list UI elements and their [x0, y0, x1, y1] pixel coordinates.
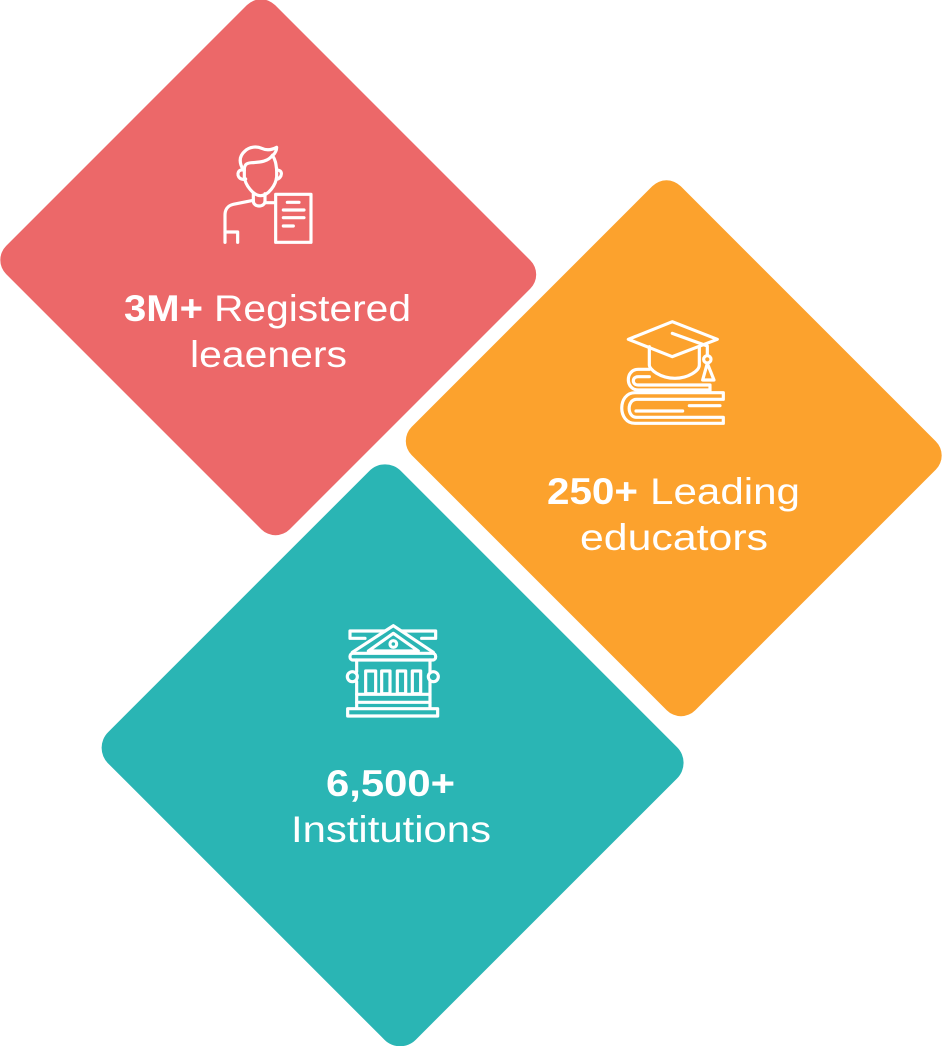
icon: learner with document — [225, 147, 311, 242]
text: 6,500+ Institutions: Institutions — [291, 809, 491, 850]
text: 6,500+ Institutions: 6,500+ — [326, 763, 455, 804]
panel: leading educators — [398, 172, 942, 724]
text: 3M+ Registered learners — [124, 288, 411, 375]
text: 250+ Leading educators: 250+ — [547, 471, 638, 512]
text: 3M+ Registered learners: leaeners — [190, 334, 347, 375]
text: 6,500+ Institutions — [291, 763, 491, 850]
icon: institution building — [347, 626, 438, 716]
icon: graduation cap on books — [622, 322, 723, 423]
text: 250+ Leading educators: Leading — [650, 471, 800, 512]
text: 3M+ Registered learners: Registered — [214, 288, 411, 329]
text: 250+ Leading educators: educators — [580, 517, 768, 558]
text: 250+ Leading educators — [547, 471, 800, 558]
text: 3M+ Registered learners: 3M+ — [124, 288, 203, 329]
panel: registered learners — [0, 0, 544, 543]
panel: institutions — [93, 455, 693, 1046]
